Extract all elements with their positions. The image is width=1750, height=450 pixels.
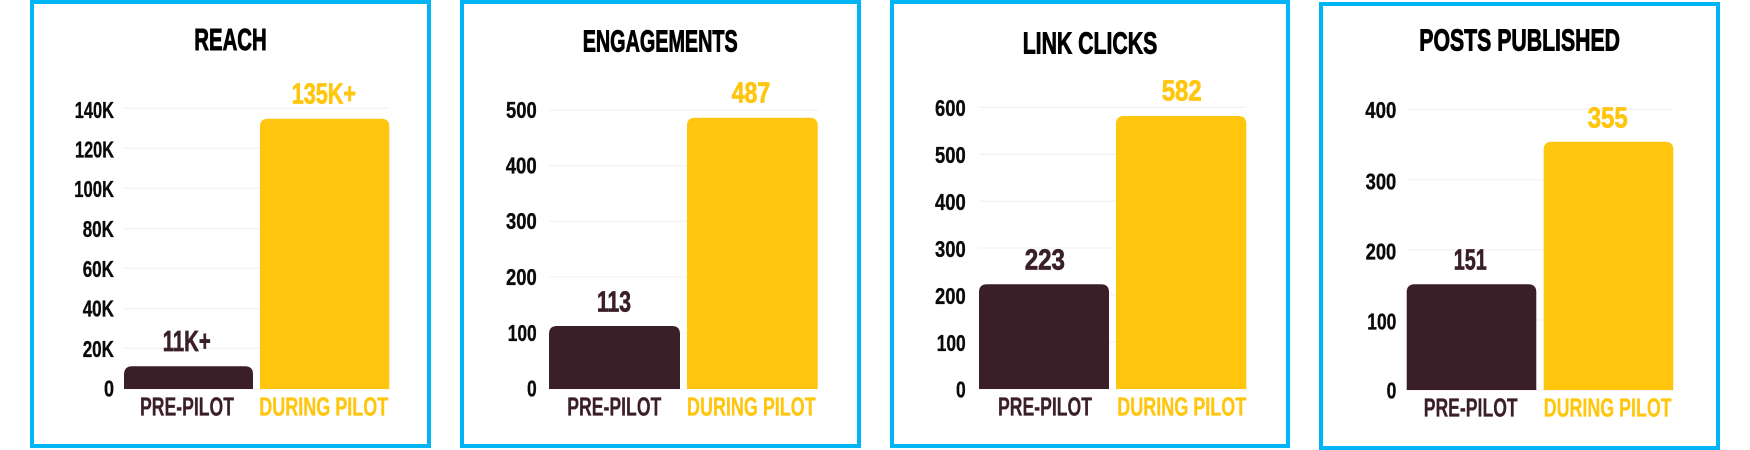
y axis labels: reach: 80K: [83, 216, 114, 242]
heading: engagements: ENGAGEMENTS: [583, 25, 738, 59]
y axis labels: posts published: [1365, 97, 1396, 404]
value: engagements during pilot: 487: [732, 77, 770, 109]
y axis labels: engagements: 400: [506, 153, 537, 179]
y axis labels: reach: 100K: [74, 176, 114, 202]
bar: link clicks pre-pilot: [979, 284, 1109, 389]
y axis labels: posts published: 300: [1366, 168, 1396, 194]
panel: posts published: [1321, 4, 1718, 448]
y axis labels: posts published: 400: [1365, 97, 1396, 123]
category label: pre-pilot: PRE-PILOT: [1424, 395, 1518, 423]
y axis labels: reach: 40K: [83, 296, 114, 322]
value: link clicks during pilot: 582: [1162, 76, 1202, 108]
category label: pre-pilot: PRE-PILOT: [998, 393, 1092, 421]
y axis labels: posts published: 100: [1367, 308, 1396, 334]
y axis labels: posts published: 200: [1366, 238, 1396, 264]
category label: during pilot: DURING PILOT: [1544, 395, 1672, 423]
y axis labels: reach: 140K: [75, 97, 114, 123]
panel: reach: [32, 2, 429, 446]
y axis labels: link clicks: 500: [935, 142, 966, 168]
panel: link clicks: [892, 2, 1288, 446]
value: reach pre-pilot: 11K+: [163, 326, 211, 358]
bar: engagements during pilot: [687, 118, 818, 389]
y axis labels: engagements: 500: [506, 97, 537, 123]
y axis labels: engagements: [506, 97, 537, 402]
y axis labels: reach: 120K: [75, 137, 114, 163]
bar: link clicks during pilot: [1116, 116, 1246, 389]
value: link clicks pre-pilot: 223: [1025, 244, 1065, 276]
y axis labels: engagements: 200: [506, 264, 537, 290]
value: reach during pilot: 135K+: [292, 78, 356, 110]
panel: engagements: [462, 2, 859, 446]
value: engagements pre-pilot: 113: [597, 287, 631, 319]
bar: posts published pre-pilot: [1407, 284, 1536, 390]
bar: reach pre-pilot: [124, 366, 253, 389]
bar: reach during pilot: [260, 119, 389, 389]
category label: during pilot: DURING PILOT: [259, 393, 389, 421]
y axis labels: link clicks: 300: [935, 236, 966, 262]
heading: posts published: POSTS PUBLISHED: [1419, 24, 1620, 58]
category label: during pilot: DURING PILOT: [687, 393, 816, 421]
y axis labels: posts published: 0: [1387, 378, 1396, 404]
y axis labels: engagements: 100: [508, 320, 537, 346]
y axis labels: link clicks: 600: [935, 95, 966, 121]
y axis labels: link clicks: 0: [956, 377, 966, 403]
heading: link clicks: LINK CLICKS: [1023, 27, 1157, 61]
y axis labels: link clicks: 400: [935, 189, 966, 215]
y axis labels: reach: 60K: [83, 256, 114, 282]
category label: pre-pilot: PRE-PILOT: [567, 393, 662, 421]
bar: posts published during pilot: [1544, 142, 1673, 390]
value: posts published pre-pilot: 151: [1454, 244, 1487, 276]
y axis labels: reach: 0: [104, 376, 114, 402]
y axis labels: link clicks: [935, 95, 966, 403]
bar: engagements pre-pilot: [549, 326, 680, 389]
y axis labels: engagements: 300: [506, 208, 537, 234]
y axis labels: reach: [74, 97, 114, 402]
value: posts published during pilot: 355: [1588, 103, 1628, 135]
y axis labels: link clicks: 100: [937, 330, 966, 356]
y axis labels: link clicks: 200: [935, 283, 966, 309]
y axis labels: engagements: 0: [527, 376, 537, 402]
heading: reach: REACH: [194, 23, 267, 57]
category label: pre-pilot: PRE-PILOT: [140, 393, 234, 421]
y axis labels: reach: 20K: [83, 336, 114, 362]
category label: during pilot: DURING PILOT: [1117, 393, 1247, 421]
